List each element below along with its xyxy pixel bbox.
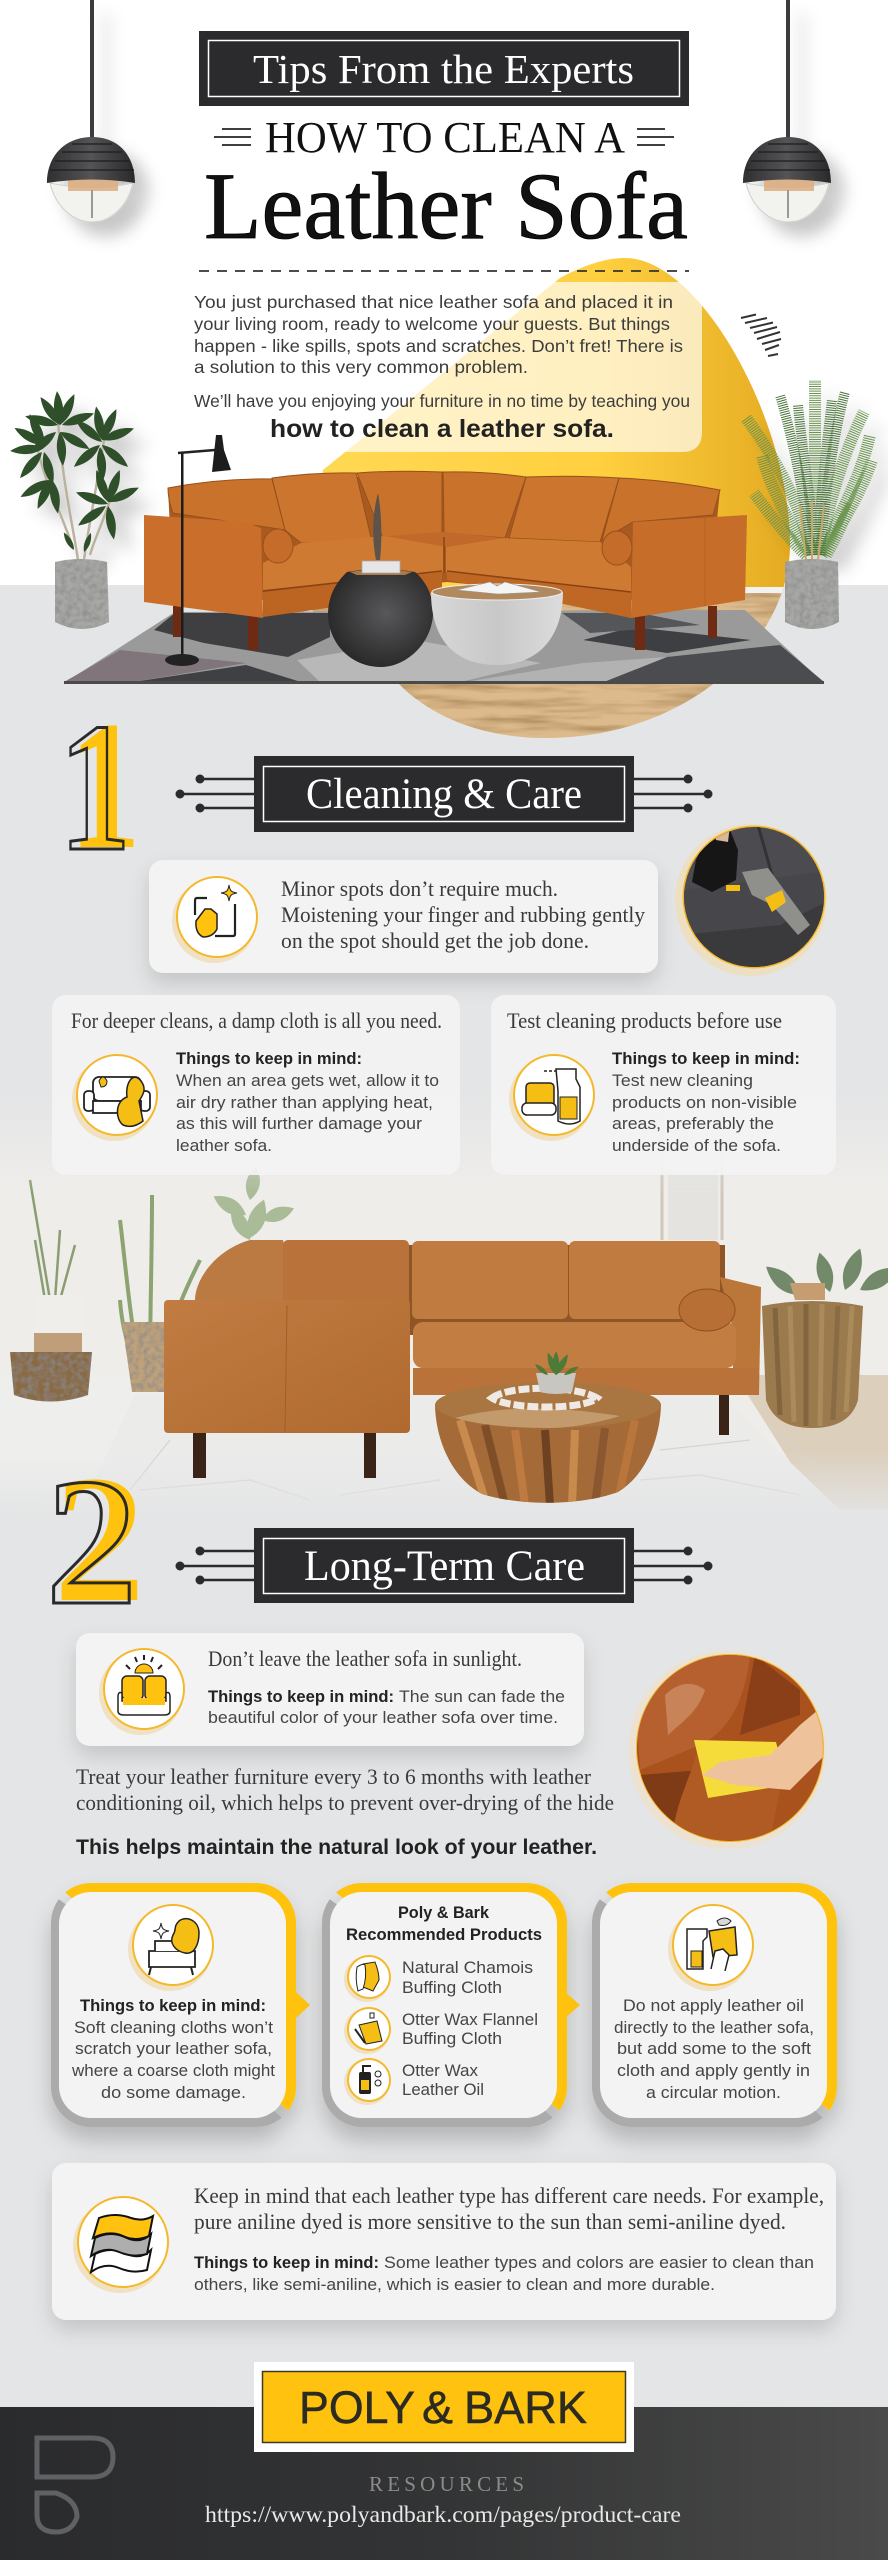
card: test cleaning products: Test new cleaning — [612, 1072, 753, 1090]
translucent intro panel — [180, 282, 702, 452]
section 1 number: 1 — [69, 683, 141, 887]
paragraph: treat your leather furniture: This helps maintain the natural look of your leather. — [76, 1836, 597, 1859]
section 2 number: 2 — [54, 1439, 145, 1640]
card: recommended products: Poly & Bark — [398, 1904, 490, 1922]
card: soft cleaning cloths: where a coarse cloth might — [71, 2062, 275, 2080]
paragraph: treat your leather furniture: conditioning oil, which helps to prevent over-drying of the hide — [76, 1790, 614, 1815]
icon: flannel cloth — [344, 2008, 390, 2054]
plant: right palm in concrete pot — [746, 380, 872, 629]
hanging lamp right — [743, 0, 831, 222]
photo: wiping leather sofa with yellow cloth — [628, 1650, 840, 1850]
card: deeper cleans: When an area gets wet, allow it to — [176, 1072, 439, 1090]
card: recommended products: Buffing Cloth — [402, 2030, 502, 2048]
heading: Leather Sofa: Leather Sofa — [204, 153, 688, 259]
floor lamp — [165, 435, 231, 666]
card: deeper cleans: For deeper cleans, a damp cloth is all you need. — [71, 1008, 442, 1033]
card: soft cleaning cloths: do some damage. — [101, 2084, 246, 2102]
card: do not apply oil directly: directly to the leather sofa, — [614, 2019, 814, 2037]
card: sunlight: beautiful color of your leather sofa over time. — [208, 1709, 558, 1727]
card: deeper cleans: leather sofa. — [176, 1137, 272, 1155]
title banner: Tips From the Experts — [199, 31, 689, 106]
paragraph: treat your leather furniture: Treat your leather furniture every 3 to 6 months with leather — [76, 1764, 592, 1789]
section 2 number: 2 — [46, 1442, 137, 1643]
intro text block: a solution to this very common problem. — [194, 357, 528, 377]
card: do not apply oil directly: but add some to the soft — [617, 2040, 811, 2058]
icon: sponge and sofa — [128, 1905, 213, 1991]
icon: spray bottle and cloth — [668, 1905, 753, 1991]
card: do not apply oil directly — [592, 1883, 837, 2127]
corner leather sofa with tables — [144, 471, 747, 667]
card: recommended products: Recommended Products — [346, 1926, 542, 1944]
footer band: RESOURCES — [369, 2472, 524, 2496]
card: leather types — [52, 2163, 836, 2320]
intro text block: You just purchased that nice leather sofa and placed it in — [194, 292, 673, 312]
dashed divider — [199, 270, 689, 272]
section 1 banner: Cleaning & Care: Cleaning & Care — [306, 771, 582, 818]
icon: hand wiping — [172, 877, 257, 963]
card: test cleaning products: underside of the sofa. — [612, 1137, 781, 1155]
card: recommended products: Otter Wax Flannel — [402, 2011, 538, 2029]
card: soft cleaning cloths: scratch your leather sofa, — [75, 2040, 272, 2058]
intro text block: happen - like spills, spots and scratches. Don’t fret! There is — [194, 336, 683, 356]
card: test cleaning products — [491, 995, 836, 1175]
card: minor spots: Moistening your finger and rubbing gently — [281, 902, 645, 927]
card: minor spots — [149, 860, 658, 973]
icon: sun over sofa — [99, 1649, 184, 1735]
card: sunlight: Things to keep in mind: — [208, 1688, 394, 1706]
card: leather types: Things to keep in mind: — [194, 2254, 379, 2272]
card: leather types: Some leather types and colors are easier to clean than — [384, 2254, 814, 2272]
icon: leather swatches — [73, 2197, 168, 2293]
card: do not apply oil directly: Do not apply leather oil — [623, 1997, 804, 2015]
card: soft cleaning cloths: Soft cleaning cloths won’t — [74, 2019, 273, 2037]
card: sunlight: The sun can fade the — [399, 1688, 565, 1706]
card: soft cleaning cloths: Things to keep in mind: — [80, 1997, 266, 2015]
card: recommended products: Natural Chamois — [402, 1959, 533, 1977]
footer band: https://www.polyandbark.com/pages/product-care — [205, 2502, 681, 2527]
section 1 number: 1 — [59, 685, 131, 889]
title banner: Tips From the Experts: Tips From the Experts — [253, 46, 634, 92]
section 1 banner: Cleaning & Care — [176, 756, 712, 832]
intro text block: We’ll have you enjoying your furniture in no time by teaching you — [194, 391, 690, 411]
card: minor spots: Minor spots don’t require much. — [281, 876, 558, 901]
icon: leather oil bottle — [344, 2059, 390, 2105]
logo: Poly & Bark: POLY — [299, 2382, 415, 2433]
intro text block — [194, 292, 690, 443]
arrow — [296, 1992, 310, 2018]
section 2 banner: Long-Term Care — [176, 1528, 712, 1603]
card: soft cleaning cloths — [51, 1883, 310, 2127]
card: test cleaning products: Things to keep in mind: — [612, 1050, 800, 1068]
icon: chamois cloth — [344, 1956, 390, 2002]
logo: Poly & Bark — [254, 2362, 634, 2452]
card: deeper cleans: Things to keep in mind: — [176, 1050, 362, 1068]
card: deeper cleans — [52, 995, 460, 1175]
card: recommended products: Buffing Cloth — [402, 1979, 502, 1997]
section 2 banner: Long-Term Care: Long-Term Care — [304, 1543, 585, 1590]
card: leather types: pure aniline dyed is more sensitive to the sun than semi-aniline dyed. — [194, 2209, 786, 2234]
card: deeper cleans: as this will further damage your — [176, 1115, 423, 1133]
footer band — [0, 2407, 888, 2560]
card: recommended products: Leather Oil — [402, 2081, 484, 2099]
wooden drum coffee table — [430, 1351, 666, 1510]
card: do not apply oil directly: cloth and apply gently in — [617, 2062, 810, 2080]
card: recommended products — [322, 1883, 580, 2127]
footer watermark logo — [37, 2438, 113, 2532]
hanging lamp left — [47, 0, 135, 222]
card: sunlight: Don’t leave the leather sofa in sunlight. — [208, 1646, 522, 1671]
tan leather sofa — [164, 1240, 761, 1478]
icon: spray bottle and sofa — [509, 1055, 594, 1141]
card: leather types: Keep in mind that each leather type has different care needs. For example, — [194, 2183, 824, 2208]
card: leather types: others, like semi-aniline, which is easier to clean and more durable. — [194, 2276, 715, 2294]
card: deeper cleans: air dry rather than applying heat, — [176, 1094, 433, 1112]
yellow egg shape with wood floor — [290, 250, 800, 743]
card: test cleaning products: products on non-visible — [612, 1094, 797, 1112]
intro text block: your living room, ready to welcome your guests. But things — [194, 314, 670, 334]
photo: cleaning gray sofa — [675, 824, 830, 976]
wooden side table — [762, 1283, 863, 1428]
logo: Poly & Bark: & — [422, 2382, 453, 2433]
intro text block: how to clean a leather sofa. — [270, 415, 614, 443]
card: do not apply oil directly: a circular motion. — [646, 2084, 781, 2102]
card: minor spots: on the spot should get the job done. — [281, 928, 589, 953]
room photo background: walls, plants, baskets, floor — [0, 1164, 888, 1507]
heading: How to clean a: HOW TO CLEAN A — [265, 113, 625, 162]
card: recommended products: Otter Wax — [402, 2062, 479, 2080]
logo: Poly & Bark: BARK — [464, 2382, 587, 2433]
rug — [64, 610, 824, 684]
card: test cleaning products: Test cleaning products before use — [507, 1008, 782, 1033]
card: sunlight — [76, 1633, 584, 1746]
plant: left tree in concrete pot — [10, 391, 141, 629]
arrow — [565, 1992, 580, 2018]
icon: sofa and vacuum — [72, 1055, 157, 1141]
decorative diagonal stripes — [741, 314, 781, 356]
paragraph: treat your leather furniture — [76, 1764, 614, 1859]
card: test cleaning products: areas, preferably the — [612, 1115, 774, 1133]
